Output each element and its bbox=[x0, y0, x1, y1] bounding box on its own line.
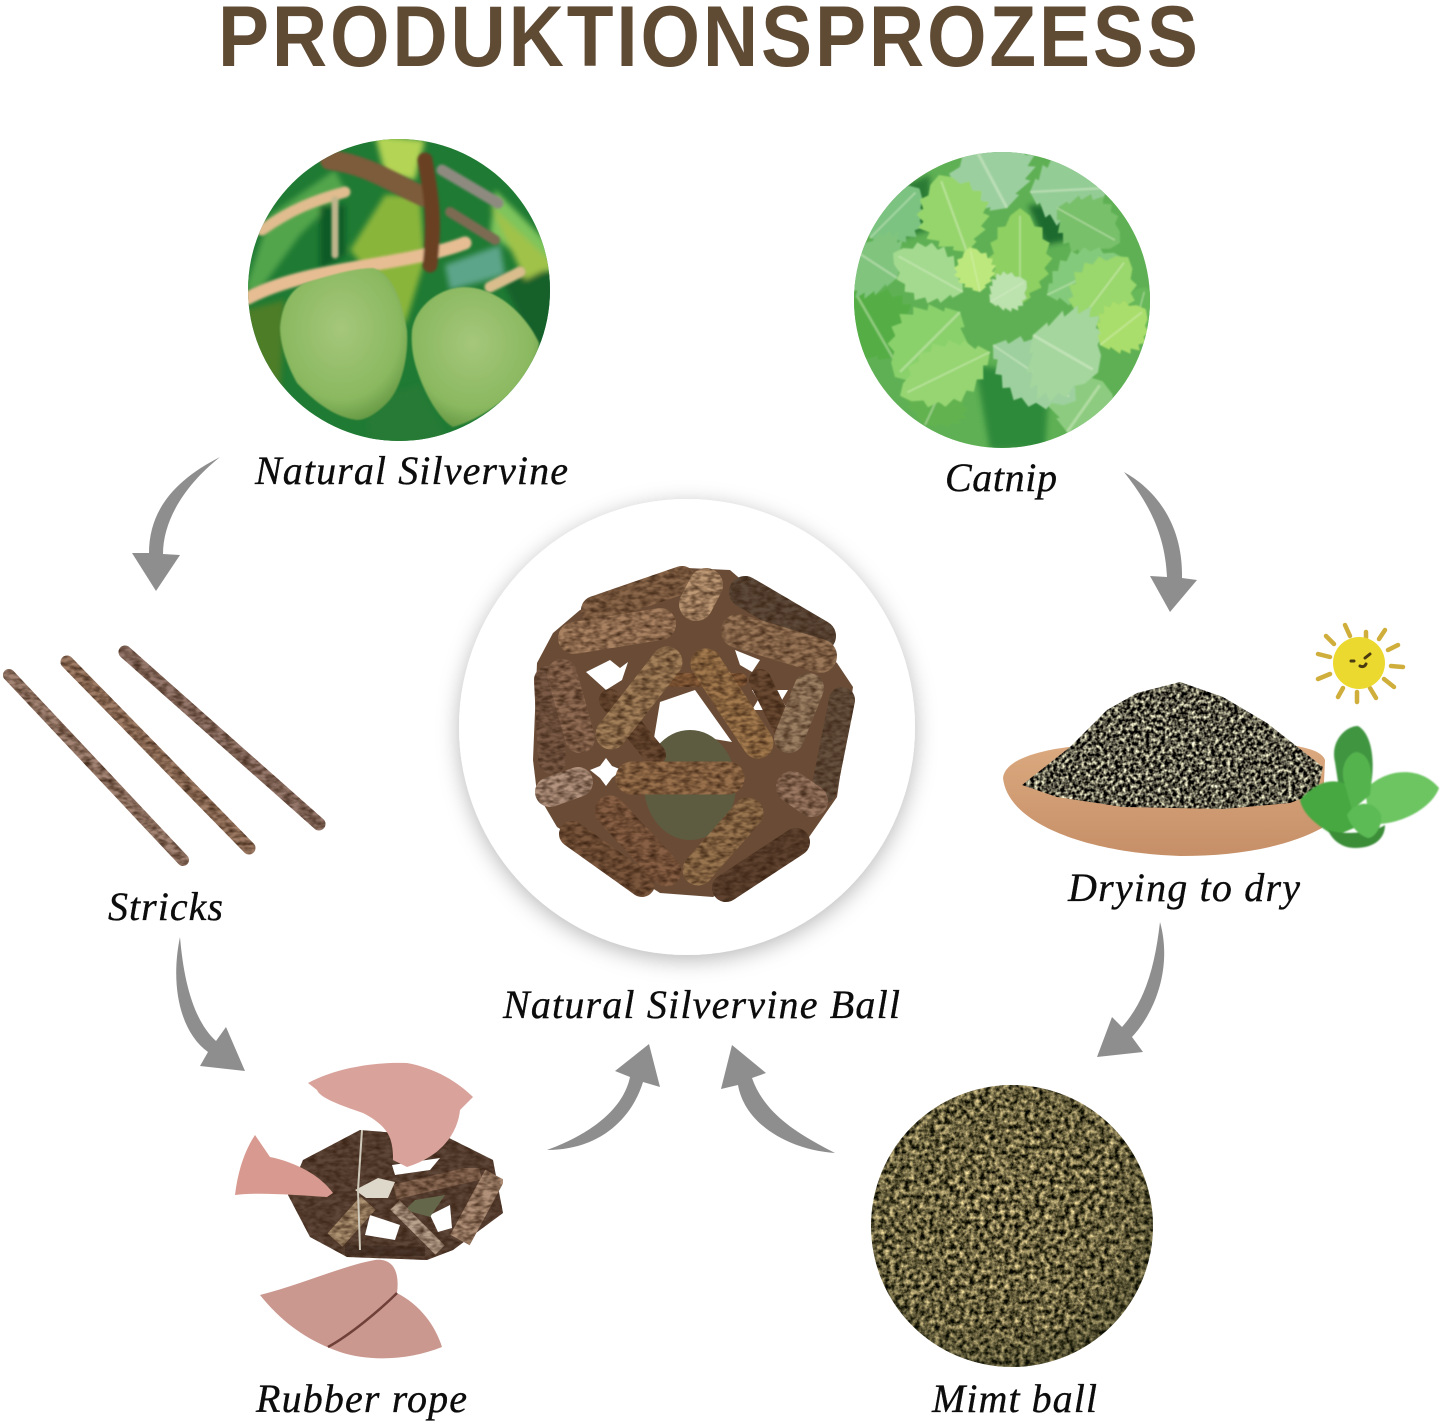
label: drying to dry: Drying to dry bbox=[1067, 865, 1300, 910]
arrow: catnip to drying bbox=[1124, 472, 1197, 612]
photo: silvervine ball bbox=[533, 568, 853, 897]
label: rubber rope: Rubber rope bbox=[255, 1376, 467, 1421]
arrow: silvervine to sticks bbox=[132, 457, 220, 591]
label: catnip: Catnip bbox=[945, 455, 1057, 500]
label: sticks: Stricks bbox=[108, 884, 223, 929]
label: natural silvervine: Natural Silvervine bbox=[254, 448, 568, 493]
photo: drying catnip on plate bbox=[1003, 625, 1439, 856]
label: natural silvervine ball: Natural Silvervine Ball bbox=[502, 982, 900, 1027]
arrow: drying to mint ball bbox=[1097, 922, 1164, 1057]
icon: mint sprig bbox=[1300, 726, 1439, 848]
icon: smiling sun bbox=[1318, 625, 1403, 702]
photo: silvervine sticks bbox=[9, 652, 319, 860]
label: mint ball: Mimt ball bbox=[931, 1376, 1097, 1421]
central white circle bbox=[459, 499, 915, 955]
photo: catnip leaves bbox=[854, 152, 1150, 448]
icon: fingers bbox=[235, 1063, 473, 1358]
photo: mint ball bbox=[871, 1085, 1153, 1367]
photo: rubber rope assembly bbox=[235, 1063, 503, 1358]
arrow: rubber rope to ball bbox=[547, 1044, 660, 1150]
arrow: mint ball to ball bbox=[721, 1045, 835, 1153]
photo: natural silvervine fruits bbox=[245, 135, 555, 445]
arrow: sticks to rubber rope bbox=[176, 937, 245, 1071]
